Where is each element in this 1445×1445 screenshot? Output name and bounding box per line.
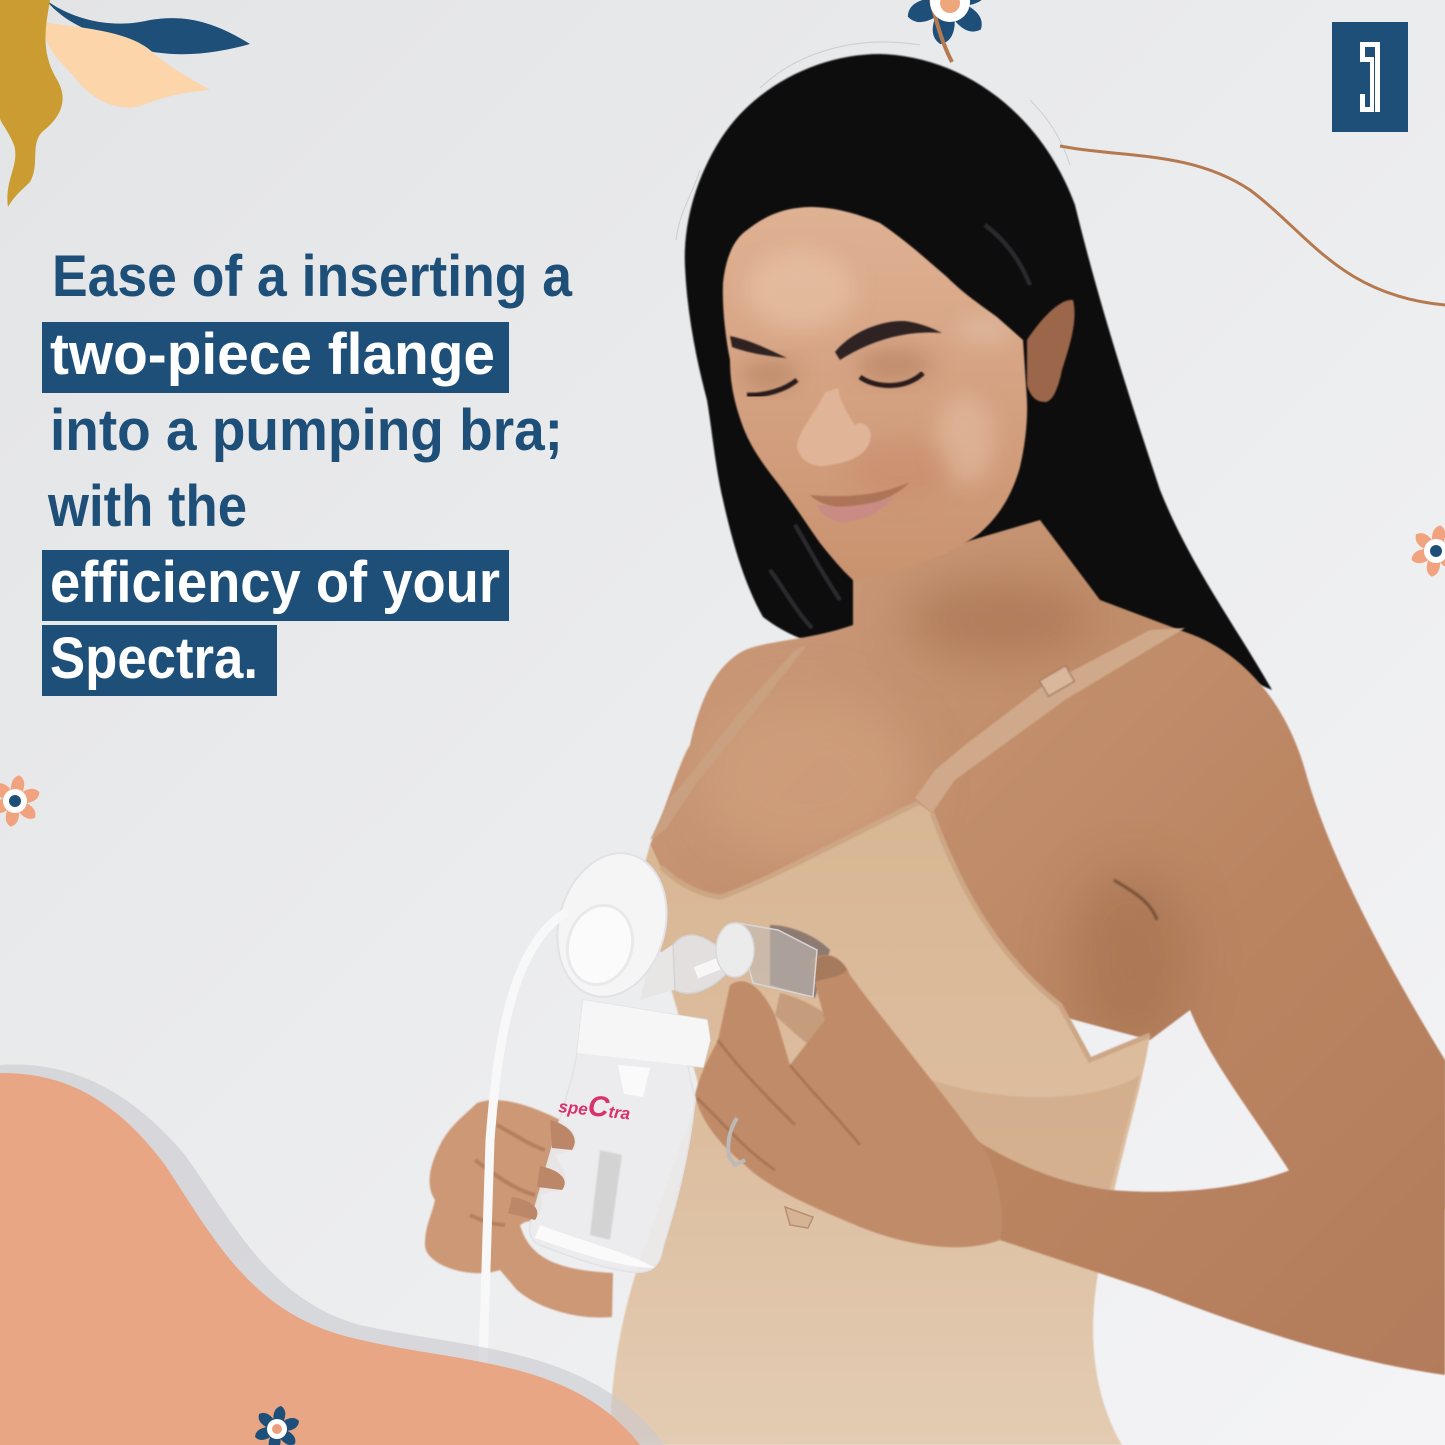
line 4: with the <box>47 474 247 539</box>
photo: woman with breast pump <box>425 42 1445 1445</box>
decoration: top-left leaves <box>0 0 250 207</box>
camisole <box>610 803 1150 1445</box>
highlight box: efficiency of your <box>42 550 509 621</box>
fingertips on bottle <box>508 1120 575 1220</box>
eyebrows <box>730 321 942 360</box>
skin under pump tunnel <box>770 925 830 998</box>
decoration: top flower with stem <box>908 0 988 62</box>
decoration: left flower <box>0 775 39 827</box>
line 3: into a pumping bra; <box>50 398 563 463</box>
decoration: peach wave bottom-left <box>0 1064 665 1445</box>
eyes <box>747 373 923 395</box>
camisole straps <box>650 628 1185 840</box>
pump tube <box>483 912 567 1365</box>
hair <box>685 54 1272 690</box>
pump flange and tunnel <box>542 841 817 1009</box>
line 6: Spectra. <box>50 626 258 691</box>
ring <box>728 1118 745 1165</box>
headline text block <box>42 244 573 696</box>
line 5: efficiency of your <box>50 550 500 615</box>
decoration: bottom flower <box>255 1406 299 1445</box>
flyaway hairs <box>676 42 1070 240</box>
lifted hand <box>695 955 1002 1247</box>
forearm <box>960 1060 1445 1375</box>
pump bottle <box>530 1000 710 1272</box>
highlight box: two-piece flange <box>42 322 509 393</box>
highlight box: Spectra <box>42 625 277 696</box>
camisole clasp <box>785 1207 813 1228</box>
decoration: thin brown curve <box>1060 146 1445 305</box>
camisole pocket fold <box>775 993 860 1080</box>
lips <box>810 482 910 522</box>
logo <box>1332 22 1408 132</box>
ear <box>1027 300 1075 402</box>
upper body skin <box>650 520 1445 1210</box>
line 2: two-piece flange <box>50 322 495 387</box>
nose <box>797 388 871 466</box>
holding hand <box>425 1100 613 1318</box>
line 1: Ease of a inserting a <box>52 244 573 309</box>
face <box>723 207 1027 580</box>
decoration: right flower <box>1412 525 1445 577</box>
spectra bottle label: speCtra <box>557 1087 632 1126</box>
